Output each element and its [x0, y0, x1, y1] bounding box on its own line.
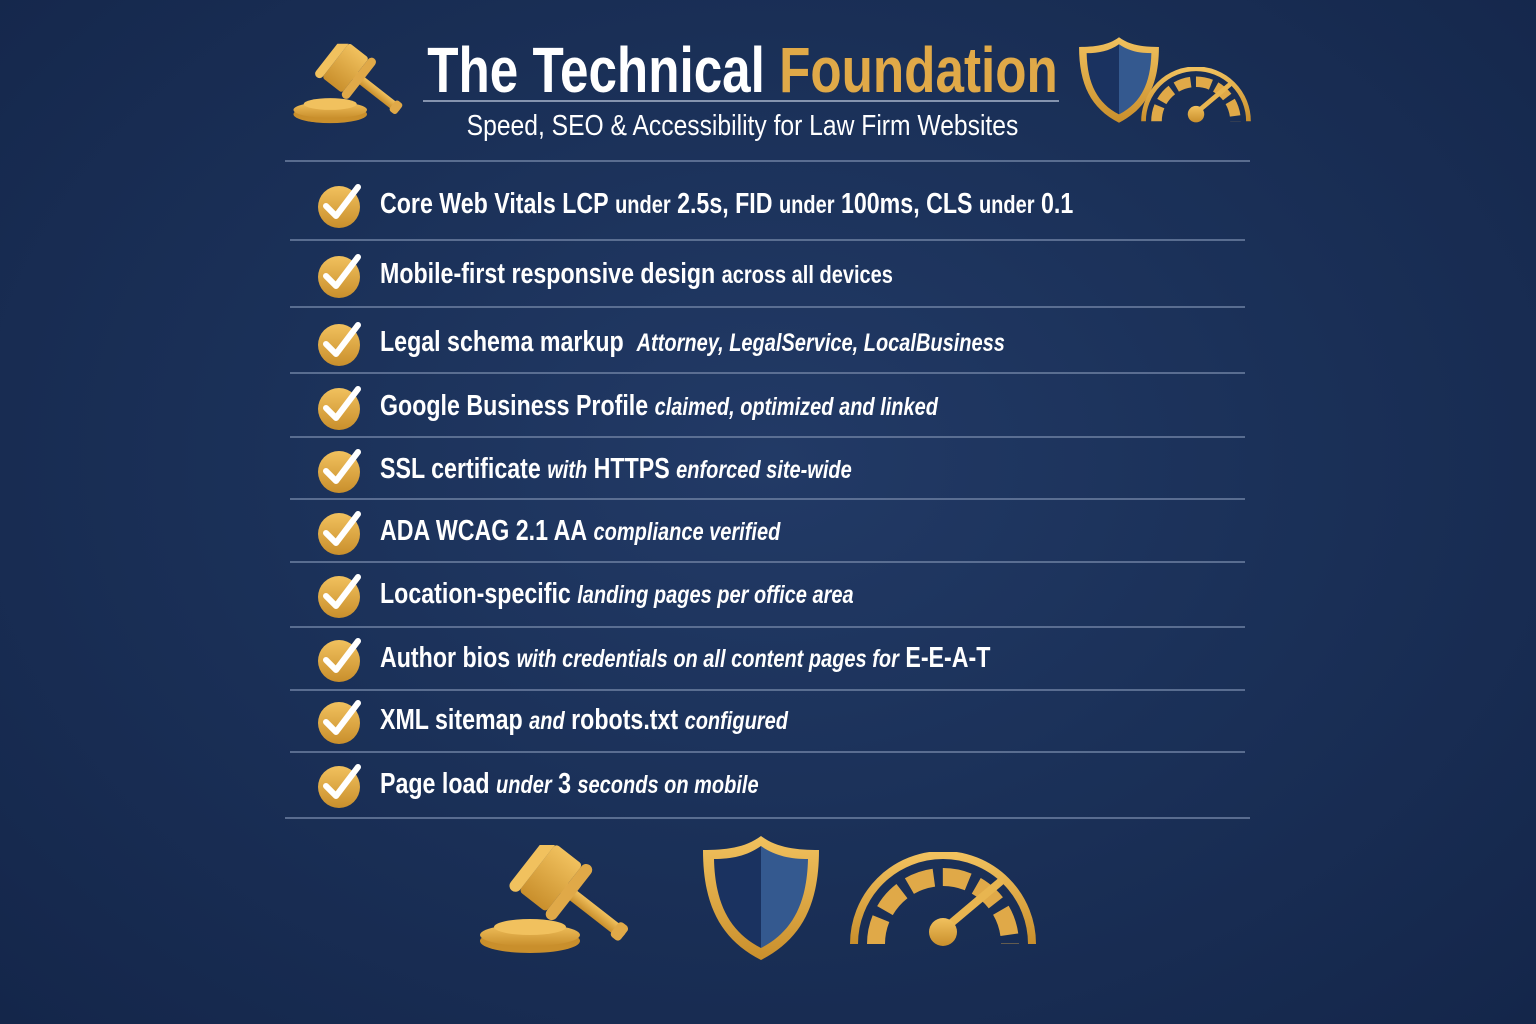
title: The Technical Foundation — [427, 34, 1058, 106]
icon: shield bottom — [703, 836, 819, 960]
checklist: Legal schema markup Attorney, LegalService, LocalBusiness — [380, 326, 1005, 358]
checklist — [318, 184, 1073, 808]
checklist: Page load under 3 seconds on mobile — [380, 768, 759, 800]
icon: gauge bottom — [850, 852, 1036, 946]
item 10 — [318, 764, 759, 808]
item 2 — [318, 254, 893, 298]
item 1 — [318, 184, 1073, 228]
checklist: Core Web Vitals LCP under 2.5s, FID under 100ms, CLS under 0.1 — [380, 188, 1073, 220]
item 6 — [318, 511, 781, 555]
checklist: XML sitemap and robots.txt configured — [380, 704, 788, 736]
icon: gavel top-left — [293, 44, 402, 124]
item 7 — [318, 574, 854, 618]
icon: gavel bottom — [480, 845, 628, 953]
icon: gauge top-right — [1141, 67, 1251, 122]
checklist: Mobile-first responsive design across all devices — [380, 258, 893, 290]
item 5 — [318, 449, 852, 493]
item 9 — [318, 700, 788, 744]
item 8 — [318, 638, 990, 682]
item 4 — [318, 386, 938, 430]
checklist: ADA WCAG 2.1 AA compliance verified — [380, 515, 780, 547]
icon: shield top-right — [1079, 37, 1159, 123]
item 3 — [318, 322, 1005, 366]
checklist: Location-specific landing pages per office area — [380, 578, 854, 610]
checklist: Google Business Profile claimed, optimized and linked — [380, 390, 938, 422]
checklist: Author bios with credentials on all content pages for E-E-A-T — [380, 642, 990, 674]
checklist: SSL certificate with HTTPS enforced site-wide — [380, 453, 852, 485]
subtitle: Speed, SEO & Accessibility for Law Firm Websites — [467, 110, 1018, 142]
